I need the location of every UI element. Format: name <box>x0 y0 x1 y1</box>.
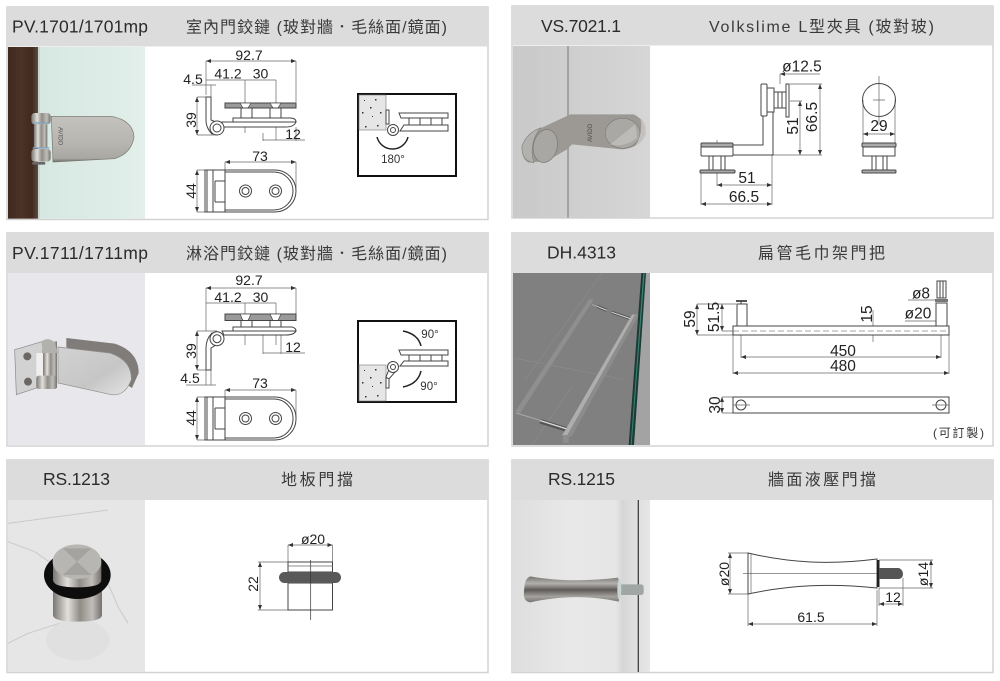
diagram: 90 degree opening both ways <box>358 321 456 402</box>
model number: VS.7021.1 <box>541 16 621 36</box>
technical drawing: handle views: 480 <box>830 358 856 375</box>
model number: PV.1711/1711mp <box>12 243 148 263</box>
technical drawing: side and top views: 44 <box>183 183 199 199</box>
photo: hinge on glass door <box>8 47 145 219</box>
technical drawing: floor stop: ø20 <box>301 531 325 547</box>
technical drawing: side and top views: 73 <box>252 375 268 391</box>
technical drawing: handle views: 15 <box>859 305 876 323</box>
diagram: 90 degree opening both ways: 90° <box>420 381 438 393</box>
technical drawing: side and top views: 12 <box>285 339 301 355</box>
technical drawing: clamp views: 29 <box>870 118 888 135</box>
technical drawing: handle views <box>682 281 984 440</box>
technical drawing: side and top views <box>180 272 305 440</box>
diagram: 90 degree opening both ways: 90° <box>421 329 439 341</box>
technical drawing: side and top views: 30 <box>253 289 268 305</box>
technical drawing: handle views: 30 <box>707 396 724 414</box>
technical drawing: clamp views: 51 <box>785 117 802 135</box>
photo: wall stop <box>513 500 650 672</box>
technical drawing: side and top views: 4.5 <box>183 71 203 87</box>
model number: RS.1213 <box>43 469 110 489</box>
diagram: 180 degree opening <box>358 94 456 176</box>
technical drawing: side and top views: 39 <box>183 343 199 359</box>
photo: L clamp on glass <box>513 46 650 218</box>
panel: VS.7021.1 L-shaped clamp <box>512 6 993 218</box>
technical drawing: side and top views: 30 <box>253 66 268 82</box>
product title: 地板門擋 <box>281 471 353 489</box>
technical drawing: wall stop: ø20 <box>716 562 732 586</box>
technical drawing: handle views: ø8 <box>912 286 930 302</box>
photo: L clamp on glass: AVIDO <box>588 123 594 142</box>
technical drawing: floor stop <box>245 531 341 620</box>
model number: PV.1701/1701mp <box>12 16 148 36</box>
product title: 扁管毛巾架門把 <box>758 244 885 262</box>
technical drawing: side and top views: 39 <box>183 112 199 128</box>
technical drawing: side and top views: 73 <box>252 148 268 164</box>
handle side view <box>733 281 949 335</box>
handle plan view <box>733 397 949 413</box>
technical drawing: side and top views: 92.7 <box>235 47 263 63</box>
technical drawing: wall stop: 12 <box>885 589 901 605</box>
model number: RS.1215 <box>548 469 615 489</box>
panel: RS.1215 wall hydraulic door stop <box>512 460 993 672</box>
product title: 牆面液壓門擋 <box>768 471 876 489</box>
technical drawing: clamp views: 66.5 <box>729 189 759 206</box>
hinge top view <box>205 397 296 440</box>
panel: PV.1711 shower door hinge <box>7 233 488 446</box>
hinge side view <box>206 314 296 370</box>
photo: hinge on glass door: AVIDO <box>57 127 63 146</box>
technical drawing: side and top views: 92.7 <box>235 272 263 288</box>
technical drawing: floor stop: 22 <box>245 576 261 592</box>
technical drawing: side and top views: 4.5 <box>180 370 200 386</box>
technical drawing: handle views: 450 <box>830 343 856 360</box>
panel: DH.4313 towel bar door handle <box>512 233 993 446</box>
technical drawing: clamp views: 66.5 <box>804 102 821 132</box>
floor stop elevation <box>279 560 341 620</box>
wall stop elevation <box>743 553 903 594</box>
hinge top view <box>205 170 296 212</box>
panel: PV.1701 indoor door hinge <box>7 7 488 220</box>
photo: polished hinge <box>8 273 145 445</box>
hinge side view <box>206 97 296 135</box>
product title: 室內門鉸鏈 (玻對牆．毛絲面/鏡面) <box>186 18 447 36</box>
product title: Volkslime L型夾具 (玻對玻) <box>709 18 934 36</box>
technical drawing: wall stop: ø14 <box>915 562 931 586</box>
photo: handle on glass <box>513 273 650 445</box>
technical drawing: handle views: ø20 <box>905 306 932 322</box>
photo: floor stop on marble <box>8 500 145 672</box>
technical drawing: wall stop: 61.5 <box>797 609 825 625</box>
technical drawing: handle views: 51.5 <box>706 302 723 332</box>
technical drawing: side and top views: 12 <box>285 126 301 142</box>
technical drawing: side and top views: 41.2 <box>214 289 242 305</box>
product title: 淋浴門鉸鏈 (玻對牆．毛絲面/鏡面) <box>186 244 447 263</box>
panel: RS.1213 floor door stop <box>7 460 488 672</box>
note: made to order: (可訂製) <box>933 425 984 440</box>
model number: DH.4313 <box>547 242 616 262</box>
technical drawing: side and top views <box>183 47 305 212</box>
technical drawing: handle views: 59 <box>682 310 699 328</box>
technical drawing: clamp views <box>700 58 896 206</box>
clamp side view <box>700 84 789 173</box>
diagram: 180 degree opening: 180° <box>381 154 405 166</box>
technical drawing: clamp views: 51 <box>738 170 756 187</box>
technical drawing: clamp views: ø12.5 <box>782 58 822 76</box>
clamp front view <box>862 84 896 173</box>
technical drawing: side and top views: 44 <box>183 410 199 426</box>
technical drawing: side and top views: 41.2 <box>214 66 242 82</box>
technical drawing: wall stop <box>716 553 933 626</box>
